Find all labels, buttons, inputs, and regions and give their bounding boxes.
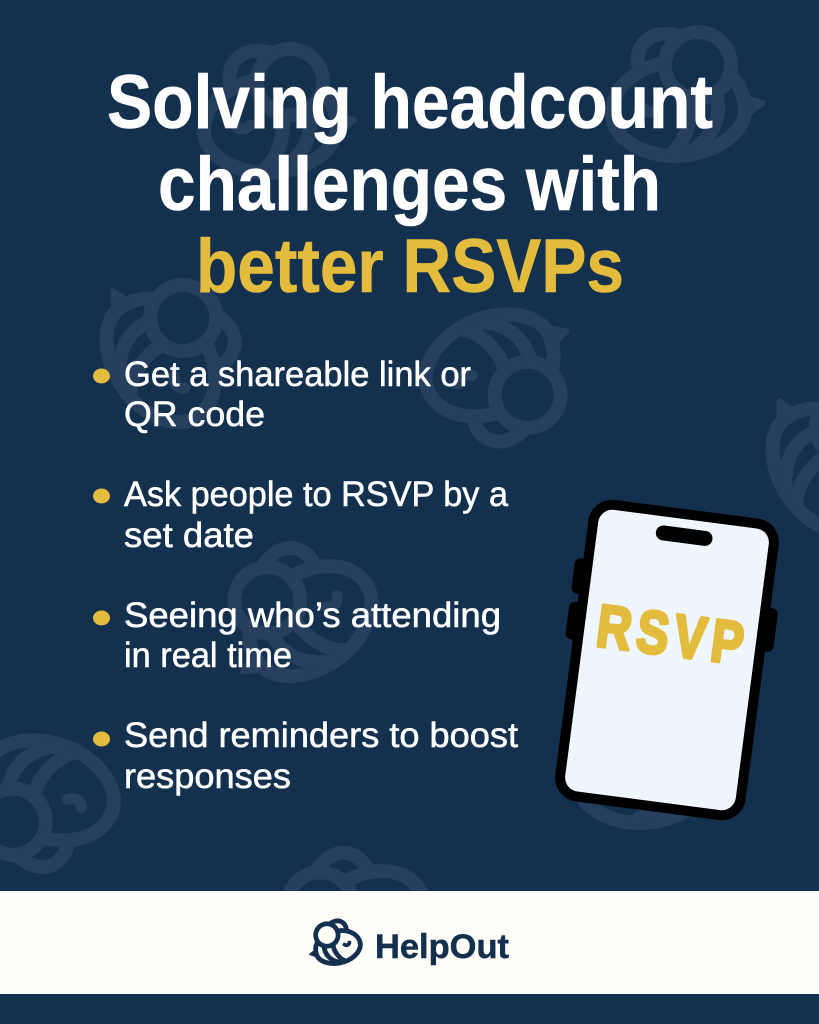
logo: HelpOut [302, 915, 509, 971]
bullet 1: Get a shareable link or [124, 355, 471, 394]
icon: bee behind title [204, 49, 355, 173]
RSVP label: RSVP [593, 592, 748, 678]
title [107, 60, 713, 309]
logo wordmark: HelpOut [375, 928, 509, 966]
bullet 3: in real time [124, 636, 292, 675]
bullet 2: set date [124, 516, 254, 555]
bullet 4: responses [124, 757, 291, 796]
bullet list [93, 355, 518, 796]
bullet 2: Ask people to RSVP by a [124, 475, 509, 514]
bullet 2 [93, 475, 509, 555]
bullet 4 [93, 716, 518, 796]
icon: bee behind phone [577, 699, 728, 823]
icon: bee behind bullets [196, 519, 392, 712]
icon: bee top right [612, 32, 763, 156]
icon: HelpOut bee [302, 915, 364, 971]
bullet 4: Send reminders to boost [124, 716, 518, 755]
bullet 3: Seeing who’s attending [124, 596, 501, 635]
title line 1: Solving headcount [107, 60, 713, 145]
icon: bee far right [737, 357, 819, 552]
icon: bee above footer [249, 824, 445, 1017]
icon: bee bottom left [0, 712, 129, 888]
bullet 3 [93, 596, 501, 675]
footer band [0, 891, 819, 994]
title line 2: challenges with [158, 142, 661, 227]
bullet 1 [93, 355, 471, 434]
icon: bee centre [409, 284, 601, 464]
icon: bee left middle [71, 247, 262, 442]
icon: phone with RSVP [544, 496, 790, 824]
bullet 1: QR code [124, 395, 265, 434]
title line 3 highlight: better RSVPs [196, 224, 624, 309]
